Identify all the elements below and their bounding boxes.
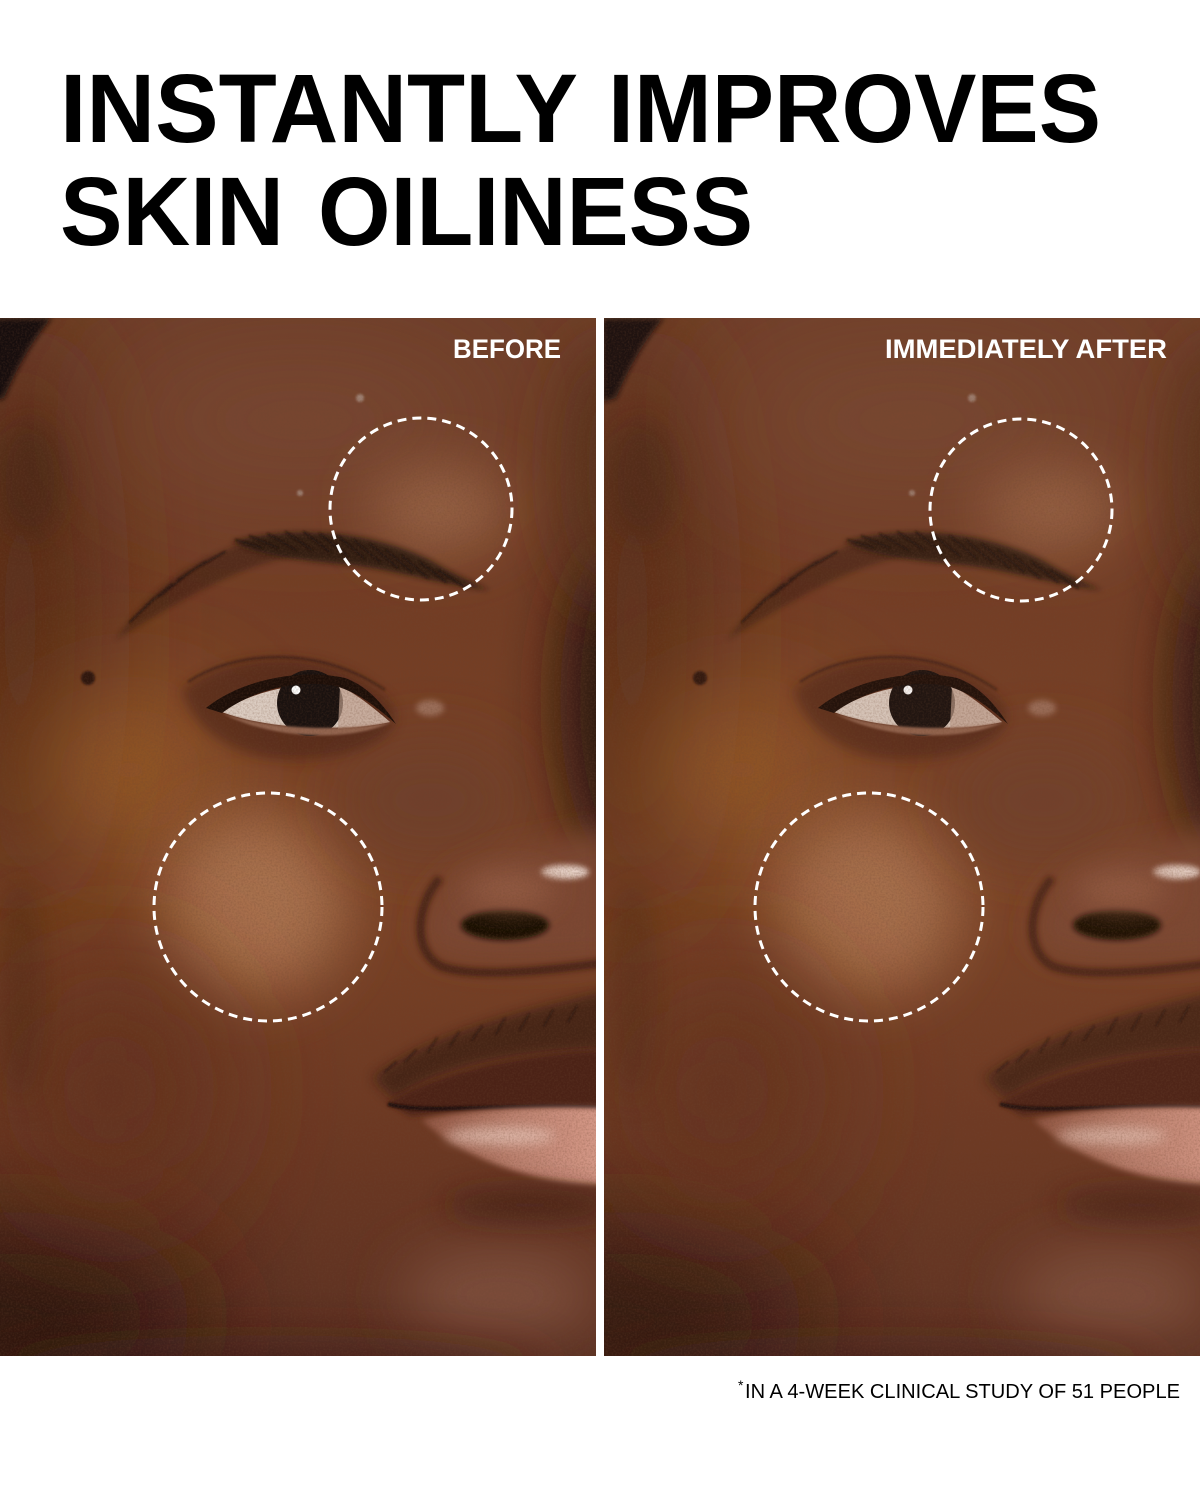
footnote: IN A 4-WEEK CLINICAL STUDY OF 51 PEOPLE <box>745 1381 1180 1403</box>
dashed circle: forehead after <box>930 419 1112 601</box>
title: OILINESS <box>318 157 753 266</box>
panel: before photo <box>0 318 596 1356</box>
dashed circle: forehead before <box>330 418 512 600</box>
title <box>60 54 1101 266</box>
panel: immediately after photo <box>604 318 1200 1356</box>
footnote: * <box>738 1377 744 1393</box>
title: INSTANTLY <box>60 54 578 163</box>
title: SKIN <box>60 157 284 266</box>
label: immediately after: IMMEDIATELY AFTER <box>885 334 1167 364</box>
label: before: BEFORE <box>453 334 561 364</box>
dashed circle: cheek before <box>154 793 382 1021</box>
title: IMPROVES <box>608 54 1101 163</box>
dashed circle: cheek after <box>755 793 983 1021</box>
